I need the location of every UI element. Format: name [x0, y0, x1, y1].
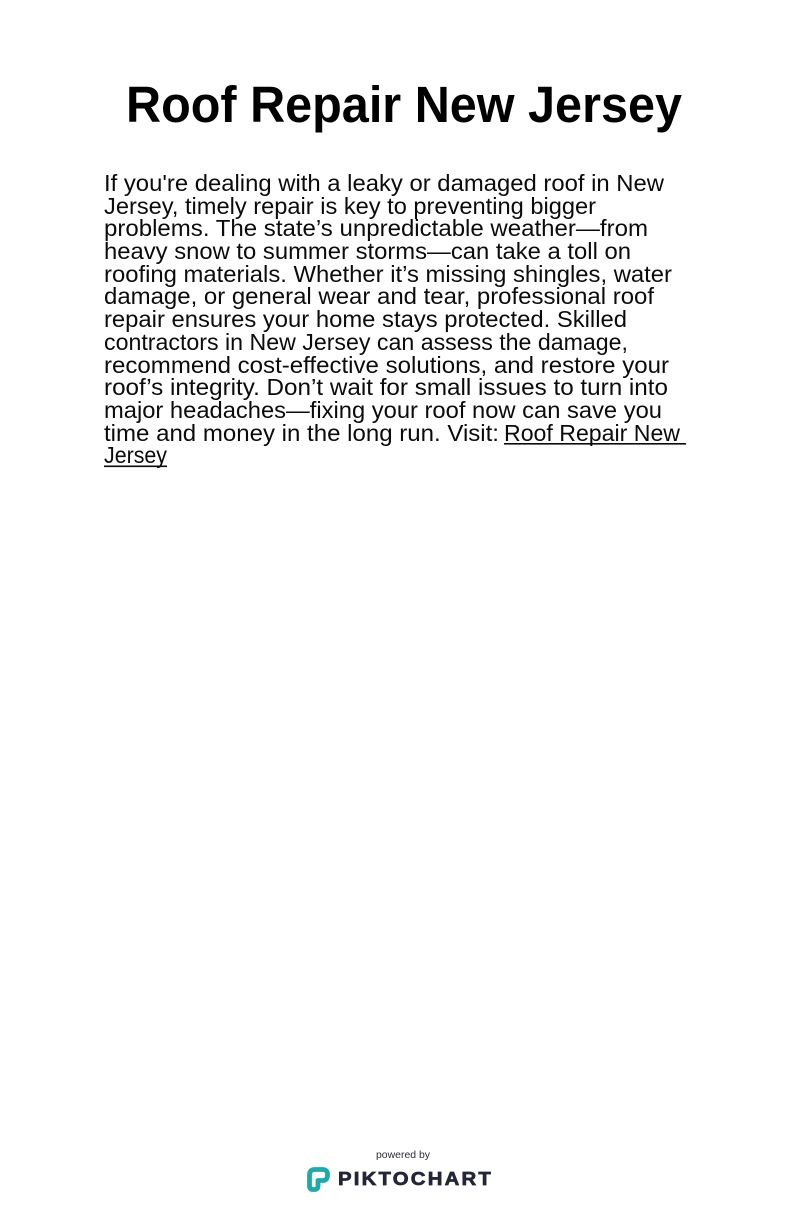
body paragraph: time and money in the long run. Visit:: [104, 420, 499, 446]
body paragraph: damage, or general wear and tear, professional roof: [104, 283, 654, 309]
body paragraph: heavy snow to summer storms—can take a toll on: [104, 238, 631, 264]
body paragraph: roof’s integrity. Don’t wait for small issues to turn into: [104, 374, 668, 400]
body paragraph: roofing materials. Whether it’s missing shingles, water: [104, 261, 672, 287]
body paragraph: contractors in New Jersey can assess the damage,: [104, 329, 628, 355]
body paragraph: repair ensures your home stays protected. Skilled: [104, 306, 627, 332]
title: Roof Repair New Jersey: [126, 76, 683, 133]
icon: Piktochart logo mark: [310, 1170, 328, 1190]
body paragraph: [104, 170, 686, 468]
body paragraph: problems. The state’s unpredictable weather—from: [104, 215, 648, 241]
body paragraph: If you're dealing with a leaky or damaged roof in New: [104, 170, 665, 196]
footer: powered by Piktochart: [310, 1149, 493, 1190]
body paragraph: Jersey, timely repair is key to preventing bigger: [104, 193, 596, 219]
Piktochart wordmark: PIKTOCHART: [338, 1168, 493, 1189]
powered by label: powered by: [376, 1149, 431, 1161]
body paragraph: Roof Repair New: [504, 420, 681, 446]
body paragraph: major headaches—fixing your roof now can save you: [104, 397, 662, 423]
body paragraph: Jersey: [104, 442, 167, 468]
body paragraph: recommend cost-effective solutions, and restore your: [104, 352, 669, 378]
